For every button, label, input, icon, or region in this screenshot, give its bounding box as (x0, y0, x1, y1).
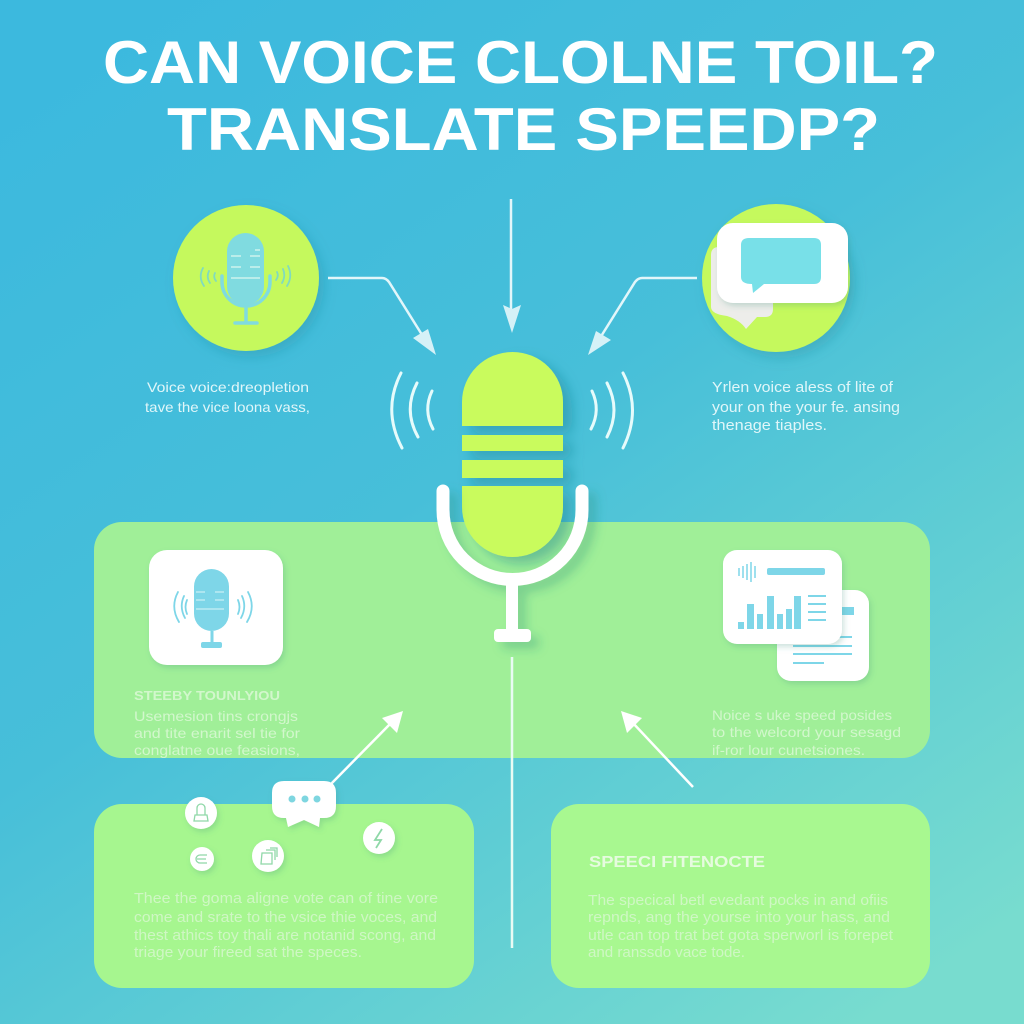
text: bottom left panel: come and srate to the vsice thie voces, and (134, 910, 437, 926)
icon: microphone circle left (173, 205, 319, 351)
text: wide panel right (712, 707, 901, 758)
text: bottom right panel: repnds, ang the yourse into your hass, and (588, 910, 890, 926)
text: top left description: Voice voice:dreopletion (147, 379, 309, 395)
text: wide panel left (134, 688, 300, 758)
text: bottom right panel: SPEECI FITENOCTE (589, 854, 765, 871)
icon: microphone card (149, 550, 283, 665)
text: bottom left panel (134, 891, 438, 961)
panel: wide middle (94, 522, 930, 758)
icon: small badge documents (252, 840, 284, 872)
text: top left description (145, 379, 310, 415)
microphone cradle and stand (443, 491, 582, 642)
text: bottom right panel: utle can top trat bet gota sperworl is forepet (588, 928, 893, 944)
title: TRANSLATE SPEEDP? (167, 96, 880, 163)
text: bottom right panel: and ranssdo vace tode. (588, 945, 745, 961)
arrow: top centre down (503, 199, 521, 333)
arrow: top left to centre (328, 278, 436, 355)
text: bottom right panel (588, 854, 893, 961)
icon: small badge lightning (363, 822, 395, 854)
title (103, 29, 938, 163)
arrow: lower right diagonal (621, 711, 693, 787)
icon: speech bubbles circle right (702, 204, 850, 352)
sound waves left (392, 373, 433, 448)
arrow: top right to centre (588, 278, 697, 355)
text: top right description: Yrlen voice aless of lite of (712, 380, 894, 396)
icon: small badge letter (190, 847, 214, 871)
icon: report cards (723, 550, 869, 681)
panel: bottom right (551, 804, 930, 988)
text: top left description: tave the vice loona vass, (145, 399, 310, 415)
text: wide panel left: Usemesion tins crongjs (134, 708, 298, 724)
text: top right description (712, 380, 900, 434)
text: wide panel right: to the welcord your sesagd (712, 724, 901, 740)
text: bottom left panel: triage your fireed sat the speces. (134, 945, 362, 961)
text: wide panel left: conglatne oue feasions, (134, 742, 300, 758)
arrow: lower centre line (511, 657, 513, 948)
text: top right description: thenage tiaples. (712, 418, 827, 434)
text: bottom right panel: The specical betl evedant pocks in and ofiis (588, 893, 888, 909)
text: wide panel right: if-ror lour cunetsiones. (712, 742, 865, 758)
title: CAN VOICE CLOLNE TOIL? (103, 29, 938, 96)
sound waves right (591, 373, 632, 448)
text: bottom left panel: Thee the goma aligne vote can of tine vore (134, 891, 438, 907)
text: bottom left panel: thest athics toy thali are notanid scong, and (134, 928, 436, 944)
text: wide panel left: STEEBY TOUNLYIOU (134, 688, 280, 703)
arrow: lower left diagonal (330, 711, 403, 785)
microphone body (462, 352, 563, 557)
icon: small badge person (185, 797, 217, 829)
text: top right description: your on the your fe. ansing (712, 400, 900, 416)
icon: chat bubble (272, 781, 336, 827)
panel: bottom left (94, 804, 474, 988)
text: wide panel left: and tite enarit sel tie for (134, 725, 300, 741)
icon: central microphone (392, 352, 632, 642)
text: wide panel right: Noice s uke speed posides (712, 707, 892, 723)
